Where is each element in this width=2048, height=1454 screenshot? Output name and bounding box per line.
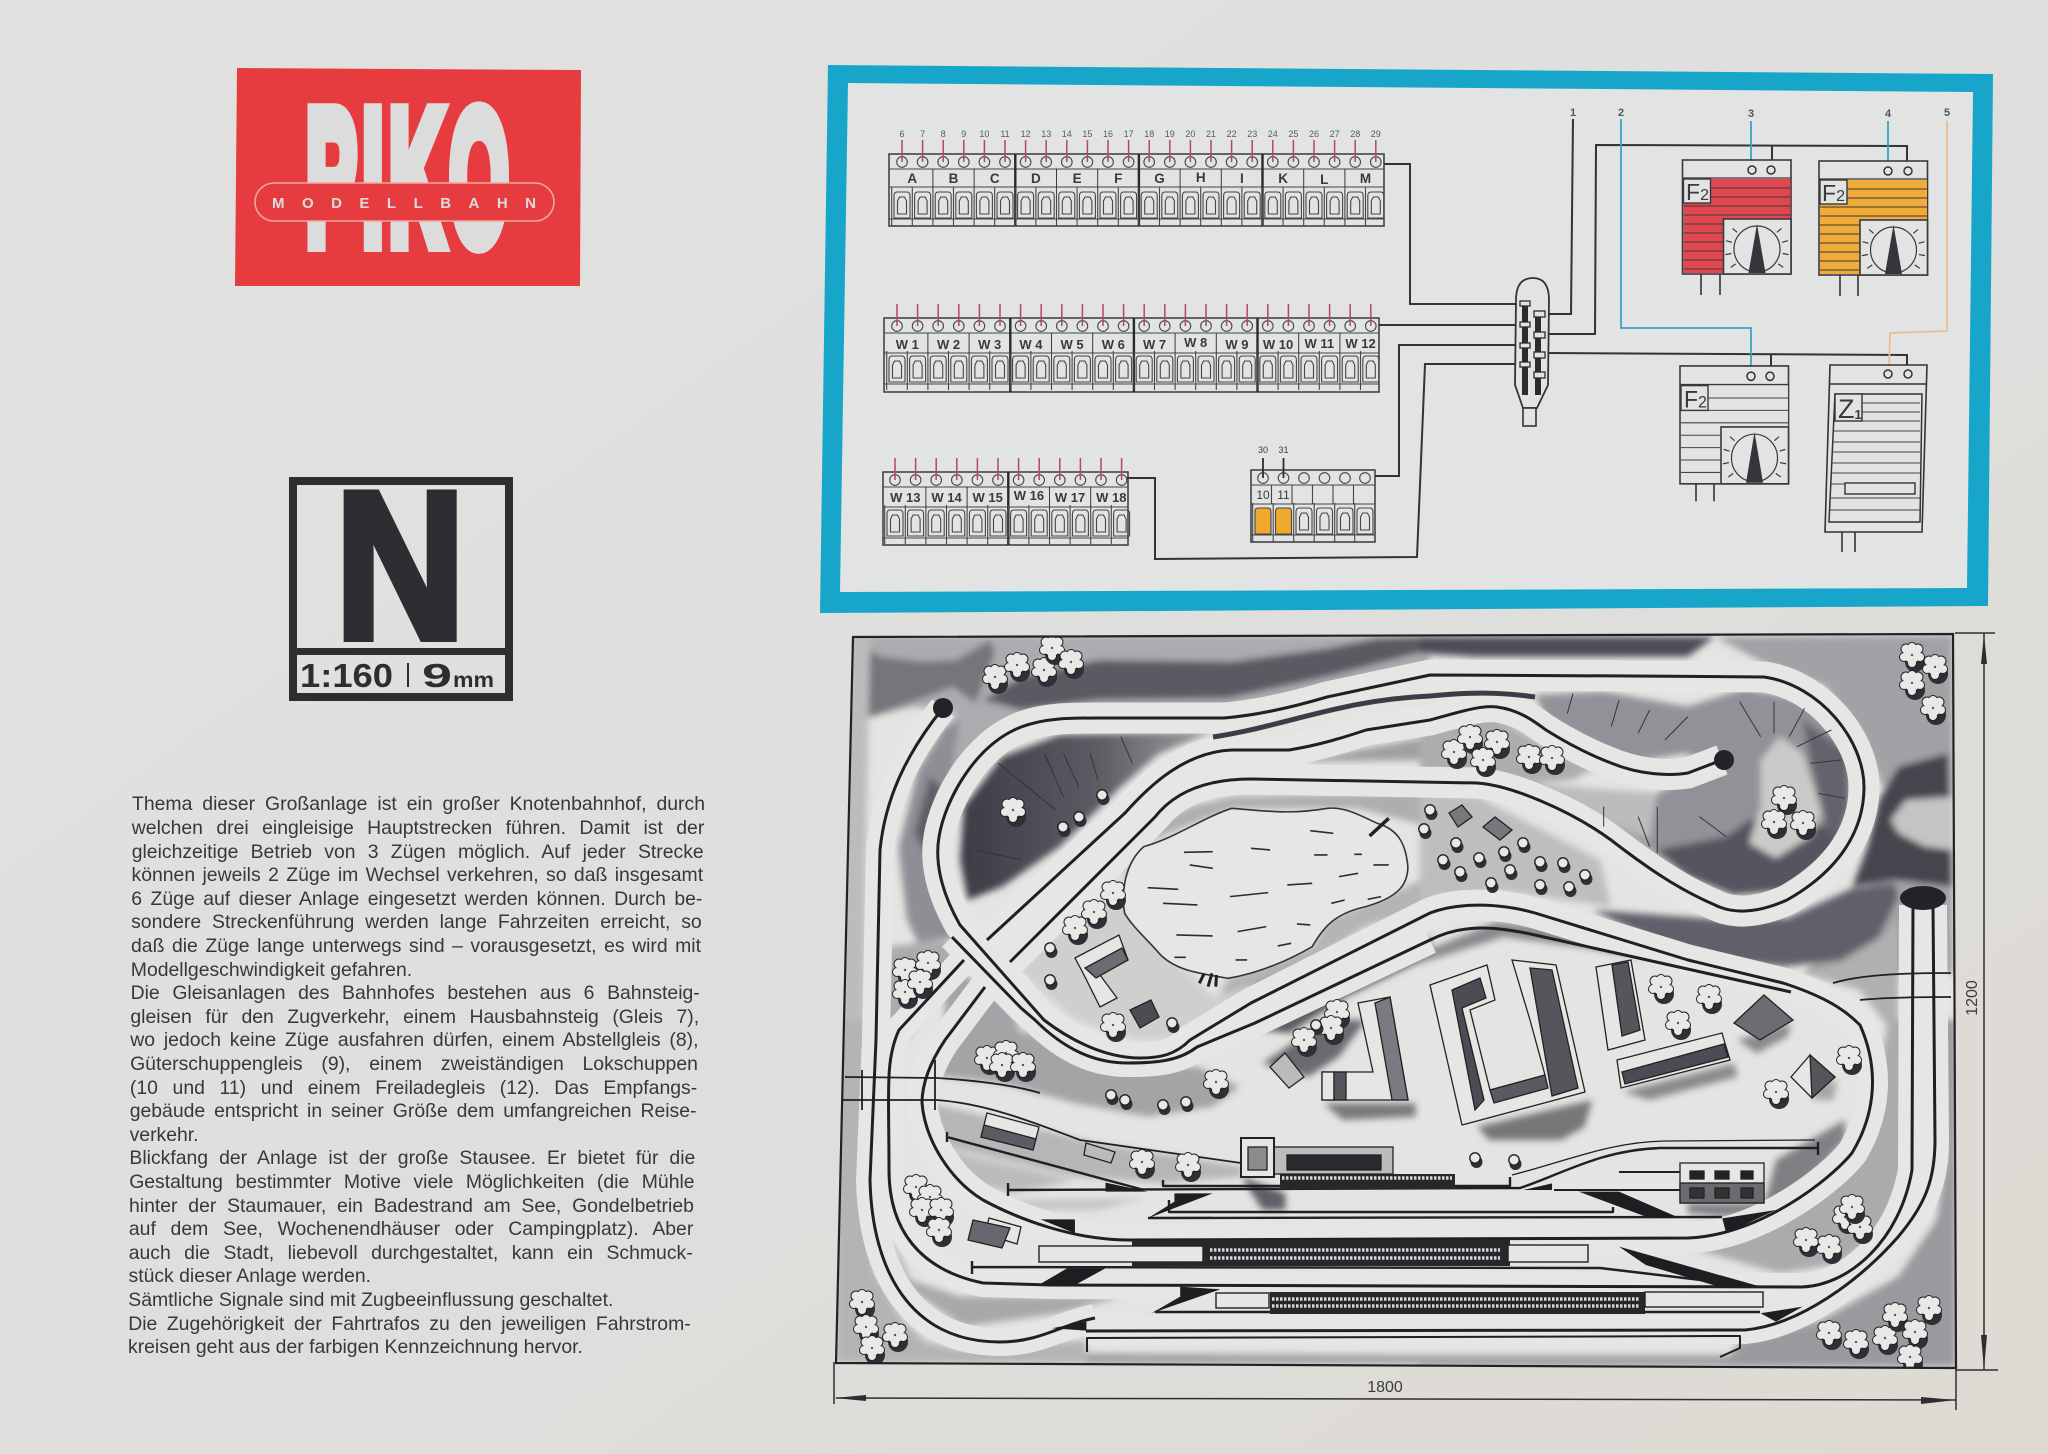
signal switch row A to M with terminals 6 to 29: 25 — [1288, 129, 1298, 139]
switch row W 1 to W 12: W 8 — [1184, 335, 1207, 350]
signal switch row A to M with terminals 6 to 29: 19 — [1165, 129, 1175, 139]
white transformer F2: F — [1684, 386, 1698, 412]
locomotive shed — [1680, 1163, 1764, 1203]
terrain washes — [836, 635, 1956, 1367]
switch module 10 and 11 with orange switches: 31 — [1278, 445, 1289, 455]
dimension 1200 arrow and label: 1200 — [1964, 980, 1981, 1016]
N scale badge — [293, 448, 509, 697]
switch row W 13 to W 18: W 14 — [931, 490, 962, 505]
dimension 1800 arrow and label — [834, 1362, 1956, 1410]
white transformer F2: 2 — [1698, 393, 1707, 411]
switch row W 1 to W 12: W 4 — [1019, 337, 1043, 352]
description text block: Gestaltung bestimmter Motive viele Möglichkeiten (die Mühle — [129, 1171, 695, 1193]
N scale badge: mm — [453, 669, 494, 692]
description text block: Güterschuppengleis (9), einem zweiständigen Lokschuppen — [130, 1053, 698, 1075]
signal switch row A to M with terminals 6 to 29: D — [1031, 171, 1041, 186]
red transformer F2 — [1682, 160, 1791, 295]
PIKO Modellbahn logo: PIKO — [306, 71, 514, 284]
wire numbers 1 to 5: 3 — [1748, 108, 1754, 120]
tunnel portals — [933, 698, 1946, 910]
red transformer F2: F — [1686, 179, 1700, 205]
signal switch row A to M with terminals 6 to 29: I — [1240, 171, 1244, 186]
station platforms and tracks — [1039, 1174, 1803, 1331]
switch row W 13 to W 18 — [883, 458, 1130, 545]
dark stripes between upper tracks — [1213, 693, 1535, 737]
signal switch row A to M with terminals 6 to 29: 7 — [920, 129, 925, 139]
signal switch row A to M with terminals 6 to 29: 29 — [1371, 129, 1381, 139]
description text block: gebäude entspricht in seiner Größe dem umfangreichen Reise- — [130, 1100, 696, 1122]
switch module 10 and 11 with orange switches: 10 — [1256, 488, 1270, 502]
description text block: hinter der Staumauer, ein Badestrand am See, Gondelbetrieb — [129, 1195, 694, 1217]
wire numbers 1 to 5: 1 — [1570, 107, 1576, 119]
reservoir lake — [1123, 808, 1408, 987]
signal switch row A to M with terminals 6 to 29 — [889, 129, 1384, 226]
switch row W 1 to W 12: W 2 — [937, 337, 960, 352]
description text block: 6 Züge auf dieser Anlage eingesetzt werden können. Durch be- — [131, 888, 702, 910]
signal switch row A to M with terminals 6 to 29: 20 — [1185, 129, 1195, 139]
hatching on hill slopes — [975, 693, 1845, 860]
wire numbers 1 to 5: 4 — [1885, 108, 1892, 120]
signal switch row A to M with terminals 6 to 29: 8 — [941, 129, 946, 139]
blue and orange feed wires — [1621, 119, 1947, 374]
description text block: gleisen für den Zugverkehr, einem Hausbahnsteig (Gleis 7), — [130, 1006, 699, 1028]
description text block: können jeweils 2 Züge im Wechsel verkehren, so daß insgesamt — [132, 864, 703, 886]
wire numbers 1 to 5: 2 — [1618, 107, 1624, 119]
signal switch row A to M with terminals 6 to 29: 18 — [1144, 129, 1154, 139]
description text block — [128, 793, 705, 1358]
signal switch row A to M with terminals 6 to 29: 9 — [961, 129, 966, 139]
switch module 10 and 11 with orange switches: 11 — [1277, 488, 1290, 502]
signal switch row A to M with terminals 6 to 29: 28 — [1350, 129, 1360, 139]
switch row W 1 to W 12: W 11 — [1304, 336, 1334, 351]
switch row W 1 to W 12: W 5 — [1061, 337, 1084, 352]
PIKO Modellbahn logo: MODELLBAHN — [272, 195, 536, 212]
switch row W 13 to W 18: W 13 — [890, 490, 920, 505]
N scale badge: 9 — [422, 657, 452, 694]
orange transformer F2: 2 — [1836, 188, 1845, 205]
signal switch row A to M with terminals 6 to 29: 24 — [1268, 129, 1278, 139]
signal switch row A to M with terminals 6 to 29: 10 — [979, 129, 989, 139]
description text block: auf dem See, Wochenendhäuser oder Campingplatz). Aber — [129, 1218, 693, 1240]
large U block — [1430, 960, 1585, 1125]
description text block: Die Zugehörigkeit der Fahrtrafos zu den jeweiligen Fahrstrom- — [128, 1313, 691, 1335]
switch module 10 and 11 with orange switches: 30 — [1258, 445, 1268, 455]
switch module 10 and 11 with orange switches — [1251, 445, 1375, 542]
dimension 1200 arrow and label — [1955, 633, 1998, 1370]
signal switch row A to M with terminals 6 to 29: 27 — [1330, 129, 1340, 139]
switch row W 1 to W 12: W 12 — [1345, 336, 1376, 351]
signal switch row A to M with terminals 6 to 29: 17 — [1124, 129, 1134, 139]
track plan layout — [836, 634, 1956, 1374]
PIKO Modellbahn logo — [235, 68, 581, 286]
description text block: daß die Züge lange unterwegs sind – vorausgesetzt, es wird mit — [131, 935, 701, 957]
signal switch row A to M with terminals 6 to 29: K — [1278, 171, 1288, 186]
signal switch row A to M with terminals 6 to 29: 15 — [1082, 129, 1092, 139]
description text block: sondere Streckenführung werden lange Fahrzeiten erreicht, so — [131, 911, 702, 933]
signal switch row A to M with terminals 6 to 29: H — [1196, 170, 1206, 185]
switch row W 1 to W 12 — [884, 304, 1379, 392]
third city block — [1596, 960, 1835, 1098]
signal switch row A to M with terminals 6 to 29: M — [1360, 171, 1371, 186]
switch row W 1 to W 12: W 9 — [1225, 337, 1248, 352]
description text block: (10 und 11) und einem Freiladegleis (12). Das Empfangs- — [130, 1077, 697, 1099]
wire numbers 1 to 5 — [1570, 107, 1950, 120]
description text block: Blickfang der Anlage ist der große Stausee. Er bietet für die — [129, 1147, 695, 1169]
signal switch row A to M with terminals 6 to 29: 26 — [1309, 129, 1319, 139]
signal switch row A to M with terminals 6 to 29: C — [990, 171, 1000, 186]
dimension 1800 arrow and label: 1800 — [1367, 1379, 1403, 1396]
description text block: kreisen geht aus der farbigen Kennzeichnung hervor. — [128, 1336, 583, 1358]
transformer Z1: Z — [1838, 394, 1854, 424]
description text block: Sämtliche Signale sind mit Zugbeeinflussung geschaltet. — [128, 1289, 613, 1311]
white transformer F2 — [1680, 366, 1788, 501]
signal switch row A to M with terminals 6 to 29: F — [1114, 171, 1122, 186]
white track beds — [870, 675, 1935, 1342]
black connection wires — [1127, 119, 1907, 559]
signal switch row A to M with terminals 6 to 29: 14 — [1062, 129, 1072, 139]
signal switch row A to M with terminals 6 to 29: 13 — [1041, 129, 1051, 139]
switch row W 13 to W 18: W 16 — [1014, 488, 1044, 503]
city buildings — [968, 805, 1835, 1248]
description text block: wo jedoch keine Züge ausfahren dürfen, einem Abstellgleis (8), — [130, 1029, 698, 1051]
signal switch row A to M with terminals 6 to 29: L — [1320, 172, 1328, 187]
signal switch row A to M with terminals 6 to 29: 11 — [1000, 129, 1010, 139]
orange transformer F2: F — [1822, 180, 1836, 206]
station building — [1241, 1138, 1393, 1177]
signal switch row A to M with terminals 6 to 29: 21 — [1206, 129, 1216, 139]
distribution connector — [1515, 278, 1549, 426]
weekend houses — [1449, 805, 1512, 840]
block near lake — [1075, 935, 1159, 1028]
trees — [850, 636, 1948, 1374]
signal switch row A to M with terminals 6 to 29: G — [1154, 171, 1165, 186]
signal switch row A to M with terminals 6 to 29: 23 — [1247, 129, 1257, 139]
description text block: Modellgeschwindigkeit gefahren. — [131, 959, 412, 981]
red transformer F2: 2 — [1700, 187, 1709, 204]
N scale badge: 1:160 — [300, 657, 393, 694]
block of flats centre — [1270, 997, 1408, 1100]
signal switch row A to M with terminals 6 to 29: 12 — [1021, 129, 1031, 139]
transformer Z1 — [1825, 365, 1927, 552]
description text block: welchen drei eingleisige Hauptstrecken führen. Damit ist der — [132, 817, 704, 839]
description text block: verkehr. — [130, 1124, 199, 1146]
switch row W 1 to W 12: W 10 — [1263, 337, 1293, 352]
orange transformer F2 — [1819, 161, 1928, 296]
switch row W 13 to W 18: W 18 — [1096, 490, 1126, 505]
switch row W 1 to W 12: W 6 — [1102, 337, 1125, 352]
switch row W 1 to W 12: W 3 — [978, 337, 1001, 352]
wire numbers 1 to 5: 5 — [1944, 107, 1950, 119]
description text block: auch die Stadt, liebevoll durchgestaltet, kann ein Schmuck- — [129, 1242, 693, 1264]
rail side buildings — [968, 1113, 1115, 1248]
signal switch row A to M with terminals 6 to 29: A — [907, 171, 917, 186]
panel: wiring diagram in blue frame — [820, 65, 1993, 613]
transformer Z1: 1 — [1854, 407, 1862, 422]
switch row W 1 to W 12: W 7 — [1143, 337, 1166, 352]
description text block: Thema dieser Großanlage ist ein großer Knotenbahnhof, durch — [132, 793, 705, 815]
signal switch row A to M with terminals 6 to 29: 22 — [1227, 129, 1237, 139]
signal switch row A to M with terminals 6 to 29: E — [1073, 171, 1082, 186]
signal switch row A to M with terminals 6 to 29: 16 — [1103, 129, 1113, 139]
signal switch row A to M with terminals 6 to 29: 6 — [899, 129, 905, 139]
switch row W 13 to W 18: W 15 — [973, 490, 1003, 505]
description text block: Die Gleisanlagen des Bahnhofes bestehen aus 6 Bahnsteig- — [131, 982, 700, 1004]
signal switch row A to M with terminals 6 to 29: B — [949, 171, 959, 186]
description text block: gleichzeitige Betrieb von 3 Zügen möglich. Auf jeder Strecke — [132, 841, 704, 863]
description text block: stück dieser Anlage werden. — [128, 1265, 371, 1287]
switch row W 13 to W 18: W 17 — [1055, 490, 1085, 505]
switch row W 1 to W 12: W 1 — [896, 337, 919, 352]
track lines — [843, 675, 1951, 1357]
N scale badge: N — [335, 448, 465, 683]
